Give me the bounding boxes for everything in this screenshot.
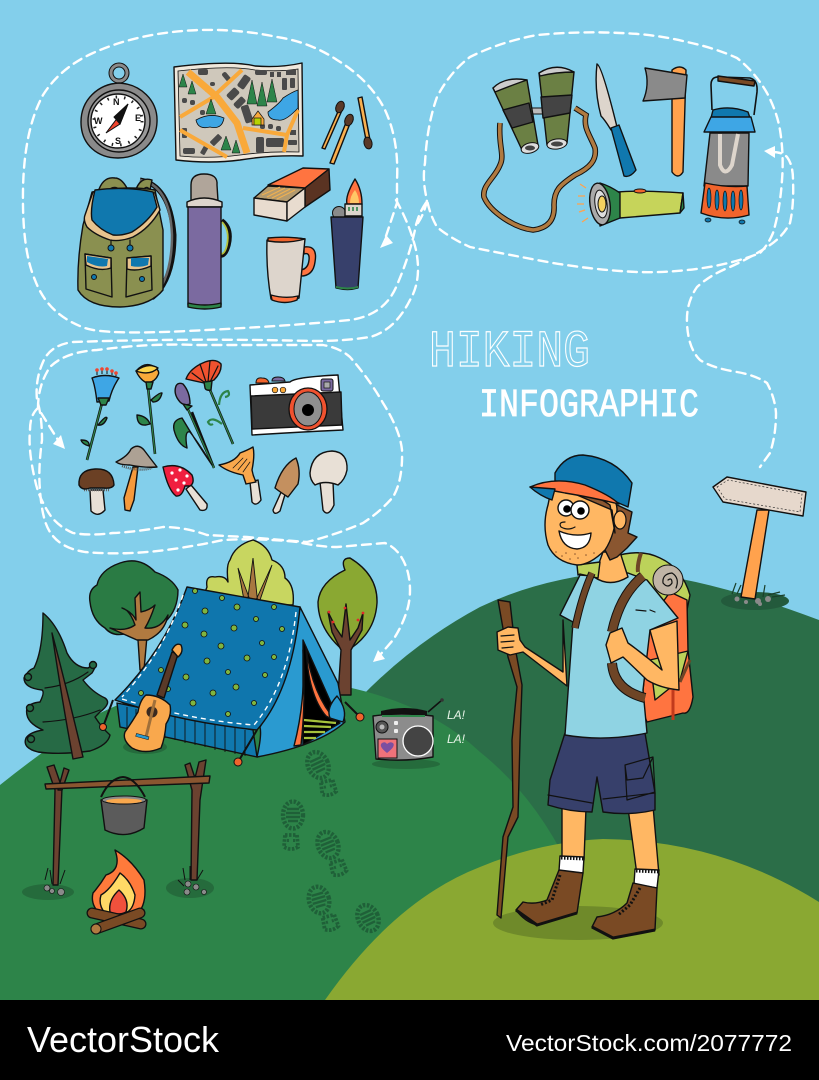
flower: purple tulip (174, 383, 214, 468)
tree: pine (24, 613, 110, 759)
footprints (283, 749, 383, 934)
icon: backpack (78, 178, 174, 307)
arrowhead: top-left loop (380, 235, 393, 248)
dashed trail: link to flowers loop (37, 200, 418, 655)
hiker (493, 455, 693, 940)
arms and torso (497, 552, 679, 738)
watermark url: VectorStock.com/2077772 (506, 1030, 792, 1056)
icon: compass: N (113, 97, 120, 107)
icon: campfire (91, 850, 145, 934)
tree: right leaf-shaped (318, 558, 377, 695)
icon: radio (372, 698, 444, 769)
arrowhead: top-right (764, 146, 775, 158)
icon: camera (250, 375, 343, 435)
dashed trail: to signpost (687, 152, 793, 467)
shadow (493, 906, 663, 940)
mushroom: chanterelle (219, 447, 261, 504)
flower: red carnation (186, 360, 233, 444)
icon: cooking tripod and pot (22, 760, 214, 900)
label: LA LA: LA! (447, 732, 466, 746)
icon: compass: S (115, 136, 121, 146)
mushroom: brown (79, 469, 114, 514)
icon: matchbox (254, 168, 330, 221)
dashed trail: flowers loop (30, 345, 402, 542)
icon: compass (81, 65, 157, 158)
backpack (613, 553, 693, 722)
hill: light green (325, 839, 819, 1000)
icon: map (174, 63, 303, 162)
icon: lighter (331, 179, 363, 290)
shorts (548, 733, 655, 814)
icon: thermos (187, 174, 230, 309)
dashed trail: top-left loop (23, 30, 428, 332)
icon: mug (267, 237, 316, 302)
footer band (0, 1000, 819, 1080)
title: INFOGRAPHIC: INFOGRAPHIC (479, 384, 699, 429)
head (530, 455, 637, 565)
boots (516, 870, 657, 938)
tree: round dark green (90, 561, 178, 670)
mushroom: morel (273, 458, 299, 513)
stick (497, 600, 522, 918)
hill: medium green (0, 678, 575, 1000)
icon: axe (643, 67, 687, 176)
arrowhead: flowers (53, 435, 65, 449)
mushroom: white (310, 451, 347, 513)
hill: dark green (340, 571, 819, 1000)
arrowhead: campsite (373, 650, 385, 662)
icon: guitar (123, 644, 182, 754)
label: LA LA (447, 708, 466, 746)
icon: flashlight (577, 182, 684, 226)
icon: compass: E (135, 113, 141, 123)
icon: lantern (701, 76, 757, 224)
mushroom: fly agaric (163, 466, 207, 510)
icon: compass: W (94, 116, 103, 126)
tree: light green behind tent (200, 540, 293, 605)
dashed trail: top-right loop (418, 32, 783, 272)
icon: knife (596, 64, 636, 176)
icon: binoculars (484, 67, 595, 230)
icon: matches (322, 97, 373, 164)
label: LA LA: LA! (447, 708, 466, 722)
icon: tent (100, 587, 364, 766)
legs (559, 806, 659, 888)
signpost (713, 477, 806, 610)
watermark logo: VectorStock (27, 1019, 220, 1060)
mushroom: grey parasol (116, 446, 157, 511)
flower: yellow rose (136, 365, 162, 454)
flower: blue bell (81, 367, 119, 460)
title: HIKING: HIKING (429, 323, 590, 382)
